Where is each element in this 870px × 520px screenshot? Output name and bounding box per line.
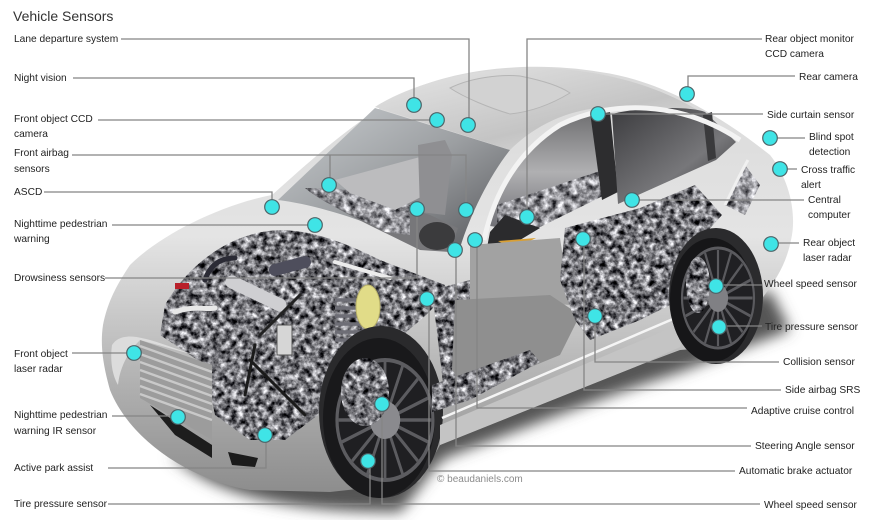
front wheel arch (319, 326, 443, 498)
sensor: central computer: computer (808, 210, 851, 221)
sensor: front tire pressure sensor: Tire pressure sensor (14, 499, 108, 510)
title: Vehicle Sensors (13, 8, 113, 24)
engine block hoses (175, 258, 390, 415)
rocker panel (440, 320, 690, 445)
sensor: nighttime pedestrian warning (13, 218, 322, 245)
sensor: drowsiness sensors: Drowsiness sensors (14, 273, 105, 284)
sensor: nighttime pedestrian warning: Nighttime pedestrian (14, 219, 107, 230)
sensor: nighttime pedestrian warning IR sensor (13, 410, 185, 437)
rear wheel arch (669, 228, 763, 364)
sensor: rear camera: Rear camera (799, 72, 858, 83)
sensor: rear tire pressure sensor: Tire pressure sensor (765, 322, 859, 333)
sensor: front object laser radar (14, 346, 141, 375)
front seat cushion and cabin (470, 238, 570, 305)
front seat headrest (418, 140, 452, 215)
sensor: collision sensor: Collision sensor (783, 357, 856, 368)
steering wheel (419, 222, 455, 250)
car body shell (102, 67, 793, 492)
sensor: drowsiness sensors (14, 202, 424, 284)
front rim (337, 360, 433, 480)
sensor: front tire pressure sensor (14, 454, 375, 510)
lower grille slot (150, 405, 212, 458)
sensor: cross traffic alert: Cross traffic (801, 165, 855, 176)
dashboard detail (305, 188, 410, 235)
sensor: front object CCD camera (14, 113, 444, 140)
sensor: blind spot detection: Blind spot (809, 132, 854, 143)
sensor: rear wheel speed sensor (709, 279, 857, 293)
sensor: side curtain sensor: Side curtain sensor (767, 110, 855, 121)
sensor: rear object monitor CCD camera: Rear object monitor (765, 34, 855, 45)
sensor: nighttime pedestrian warning IR sensor: warning IR sensor (13, 426, 97, 437)
sensor: rear tire pressure sensor (712, 320, 859, 334)
sensor: lane departure system (14, 34, 475, 132)
sensor: rear object laser radar: laser radar (803, 253, 852, 264)
front brake disc (341, 358, 389, 426)
rear pillar (703, 112, 716, 161)
side mirror (485, 215, 540, 258)
sensor: nighttime pedestrian warning IR sensor: Nighttime pedestrian (14, 410, 107, 421)
front tyre (323, 338, 435, 498)
sensor: front wheel speed sensor: Wheel speed sensor (764, 500, 857, 511)
brake reservoir yellow disc (356, 285, 380, 329)
fender cutaway (432, 280, 472, 400)
dashboard and front interior (305, 188, 458, 252)
sensor: side curtain sensor (591, 107, 855, 121)
sunroof outline (450, 76, 570, 114)
sensor: rear object laser radar: Rear object (803, 238, 855, 249)
rear tyre (670, 238, 754, 362)
sensor: cross traffic alert (773, 162, 855, 191)
sensor: rear camera (680, 72, 858, 101)
sensor: night vision (14, 73, 421, 112)
sensor: side airbag SRS (576, 232, 861, 396)
rear brake (686, 257, 710, 313)
battery terminal (175, 283, 189, 289)
sensor: nighttime pedestrian warning: warning (13, 234, 50, 245)
sill machinery (432, 350, 540, 412)
sensor: active park assist: Active park assist (14, 463, 93, 474)
sensor: ASCD (14, 187, 279, 214)
radiator fins (140, 346, 212, 420)
sensor: front airbag sensors: sensors (14, 164, 50, 175)
sensor: night vision: Night vision (14, 73, 67, 84)
sensor: central computer: Central (808, 195, 841, 206)
sensor: lane departure system: Lane departure system (14, 34, 118, 45)
car illustration (102, 67, 793, 498)
sensor: cross traffic alert: alert (801, 180, 821, 191)
mirror indicator (498, 238, 536, 245)
copyright: © beaudaniels.com (437, 474, 523, 485)
window edge highlight (484, 108, 740, 240)
rear suspension unit (725, 165, 760, 215)
sensor: automatic brake actuator (420, 292, 853, 477)
sensor: blind spot detection: detection (809, 147, 850, 158)
sensor: rear object laser radar (764, 237, 855, 264)
sensor: automatic brake actuator: Automatic brake actuator (739, 466, 853, 477)
oil filter canister (277, 325, 292, 355)
sensor: front object CCD camera: Front object CCD (14, 114, 93, 125)
front side window (490, 112, 603, 232)
sensor: front wheel speed sensor (375, 397, 857, 511)
ground shadow (170, 290, 790, 512)
sensor: side airbag SRS: Side airbag SRS (785, 385, 861, 396)
sensor: ASCD: ASCD (14, 187, 42, 198)
sensor: rear object monitor CCD camera: CCD camera (765, 49, 824, 60)
rear cutaway machinery (560, 185, 722, 340)
sensor: front object laser radar: laser radar (14, 364, 63, 375)
bumper highlight (111, 337, 205, 385)
coil spring (335, 300, 363, 340)
sensor: front airbag sensors (14, 148, 473, 217)
sensor: active park assist (14, 428, 272, 474)
windshield (278, 108, 510, 250)
roof panel (375, 68, 720, 150)
rear side window (612, 108, 736, 204)
sensor: blind spot detection (763, 131, 854, 158)
exhaust tube (725, 160, 748, 205)
sensor: rear object monitor CCD camera (520, 34, 855, 224)
radiator (140, 340, 212, 440)
sensor: front airbag sensors: Front airbag (14, 148, 69, 159)
sensor: adaptive cruise control (468, 233, 854, 417)
sensor: adaptive cruise control: Adaptive cruise control (751, 406, 854, 417)
front interior machinery (497, 170, 605, 232)
door pillar (590, 112, 618, 200)
sensor: steering angle sensor: Steering Angle sensor (755, 441, 855, 452)
seat base (452, 295, 580, 392)
rear rim (682, 248, 754, 348)
rocker stripe (442, 316, 680, 418)
front door panel (335, 157, 425, 210)
sensor: collision sensor (588, 309, 856, 368)
sensor: rear wheel speed sensor: Wheel speed sensor (764, 279, 857, 290)
sensor: central computer (625, 193, 851, 221)
sensor: front object laser radar: Front object (14, 349, 68, 360)
sensor: steering angle sensor (448, 243, 855, 452)
engine bay detail (160, 230, 445, 440)
fog lamp slot (228, 452, 258, 467)
sensor: front object CCD camera: camera (14, 129, 48, 140)
